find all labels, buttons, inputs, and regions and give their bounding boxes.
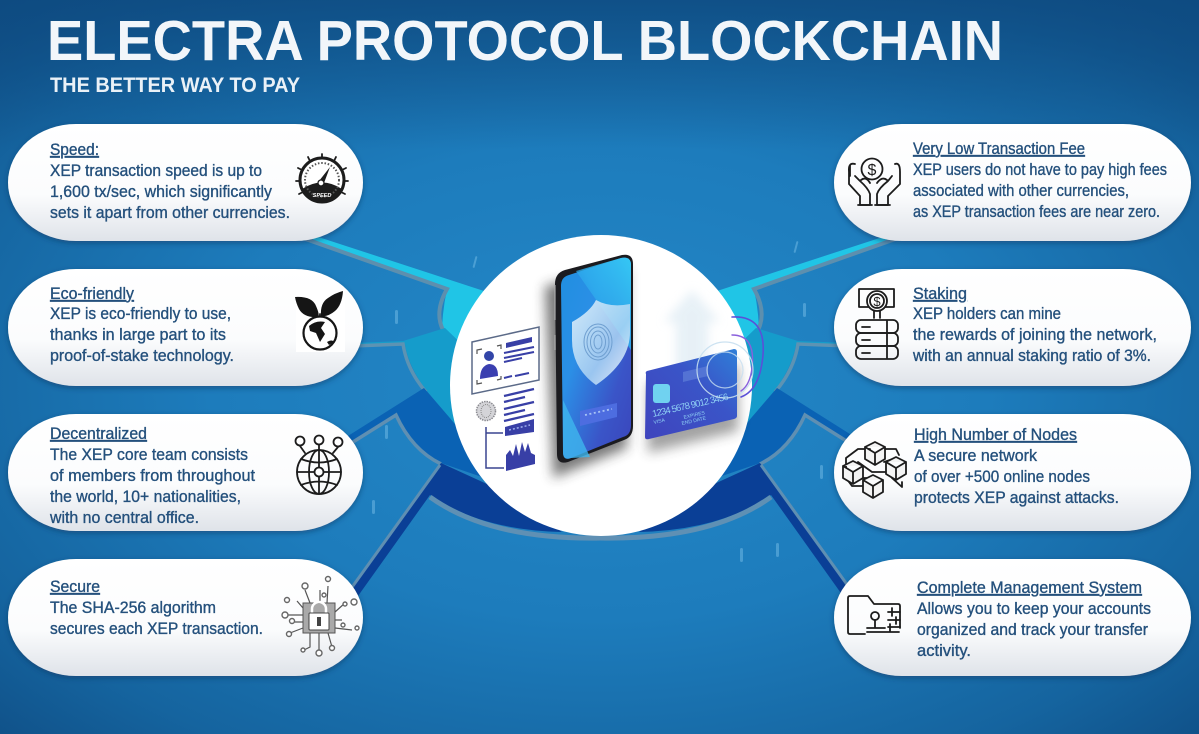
panel: Decentralized — [8, 414, 363, 531]
icon: network globe — [296, 436, 342, 494]
text block: Decentralized: with no central office. — [49, 509, 199, 527]
heading: Speed: Speed: — [50, 141, 99, 159]
heading: Secure: Secure — [50, 578, 100, 596]
icon: folder with controls — [848, 596, 900, 634]
text block: Speed — [50, 162, 290, 222]
text block: Staking — [912, 305, 1157, 365]
text block: Secure — [50, 599, 263, 638]
panel: Secure — [8, 559, 363, 676]
connector arms: left — [300, 231, 601, 596]
credit card: EXPIRES — [683, 410, 706, 421]
text block: High Number of Nodes: of over +500 online nodes — [914, 468, 1090, 486]
text block: Decentralized: of members from throughout — [50, 467, 255, 485]
credit card: END DATE — [681, 415, 707, 427]
heading: Decentralized: Decentralized — [50, 425, 147, 443]
central white circle — [450, 235, 752, 536]
text block: Very Low Transaction Fee — [913, 161, 1167, 221]
heading: Eco-friendly: Eco-friendly — [50, 285, 135, 303]
text block: High Number of Nodes: protects XEP against attacks. — [914, 489, 1119, 507]
fingerprint and text lines — [476, 389, 534, 421]
text block: Staking: the rewards of joining the network, — [913, 326, 1157, 344]
icon: speedometer — [296, 154, 348, 202]
password field — [580, 403, 617, 426]
text block: Complete Management System — [917, 600, 1151, 660]
text block: Speed: 1,600 tx/sec, which significantly — [50, 183, 273, 201]
icon: leaves and globe — [295, 290, 345, 352]
panel: Speed — [8, 124, 363, 241]
text block: Decentralized: the world, 10+ nationalities, — [50, 488, 241, 506]
text block: Eco-friendly: XEP is eco-friendly to use, — [50, 305, 231, 323]
text block: High Number of Nodes — [914, 447, 1119, 507]
shield — [572, 300, 630, 385]
icon: coin on stacked discs: $ — [873, 294, 881, 309]
credit card: 1234 5678 9012 3456 — [651, 392, 730, 420]
text block: Eco-friendly: thanks in large part to its — [50, 326, 226, 344]
text block: Very Low Transaction Fee: as XEP transaction fees are near zero. — [913, 203, 1160, 221]
panel: Complete Management System — [834, 559, 1191, 676]
heading: Complete Management System: Complete Management System — [917, 579, 1142, 597]
panel: High Number of Nodes — [834, 414, 1191, 531]
arrow: faint upload arrow — [664, 290, 720, 400]
text block: Decentralized — [49, 446, 255, 527]
heading: High Number of Nodes: High Number of Nodes — [914, 426, 1077, 444]
text block: Eco-friendly: proof-of-stake technology. — [50, 347, 234, 365]
text block: Staking: XEP holders can mine — [913, 305, 1061, 323]
central illustration — [472, 255, 763, 478]
contactless arcs — [697, 317, 763, 398]
text block: Complete Management System: activity. — [917, 642, 971, 660]
icon: speedometer: SPEED — [313, 193, 331, 199]
credit card: VISA — [653, 417, 666, 426]
text block: Decentralized: The XEP core team consists — [50, 446, 248, 464]
icon: hands holding coin — [849, 158, 900, 205]
ID card document — [472, 327, 539, 394]
icon: circuit lock — [282, 576, 359, 656]
text block: Eco-friendly — [50, 305, 234, 365]
text block: Very Low Transaction Fee: XEP users do not have to pay high fees — [913, 161, 1167, 179]
text block: High Number of Nodes: A secure network — [914, 447, 1038, 465]
icon: coin on stacked discs — [856, 289, 898, 359]
icon: hands holding coin: $ — [868, 162, 877, 179]
heading: Very Low Transaction Fee: Very Low Transaction Fee — [913, 140, 1085, 158]
smartphone — [545, 255, 633, 478]
text block: Very Low Transaction Fee: associated with other currencies, — [913, 182, 1129, 200]
connector arms: right — [600, 231, 901, 596]
flow chart with field and bars — [486, 419, 535, 471]
heading: Staking: Staking — [913, 285, 967, 303]
credit card — [645, 349, 738, 453]
panel: Very Low Transaction Fee — [834, 124, 1191, 241]
text block: Secure: secures each XEP transaction. — [50, 620, 263, 638]
text block: Secure: The SHA-256 algorithm — [50, 599, 216, 617]
text block: Complete Management System: Allows you to keep your accounts — [917, 600, 1151, 618]
title: ELECTRA PROTOCOL BLOCKCHAIN — [47, 9, 1003, 73]
panel: Eco-friendly — [8, 269, 363, 386]
subtitle: THE BETTER WAY TO PAY — [50, 74, 300, 97]
text block: Speed: XEP transaction speed is up to — [50, 162, 262, 180]
text block: Speed: sets it apart from other currencies. — [50, 204, 290, 222]
icon: connected cubes — [843, 442, 906, 498]
panel: Staking — [834, 269, 1191, 386]
text block: Complete Management System: organized and track your transfer — [917, 621, 1148, 639]
text block: Staking: with an annual staking ratio of 3%. — [912, 347, 1151, 365]
